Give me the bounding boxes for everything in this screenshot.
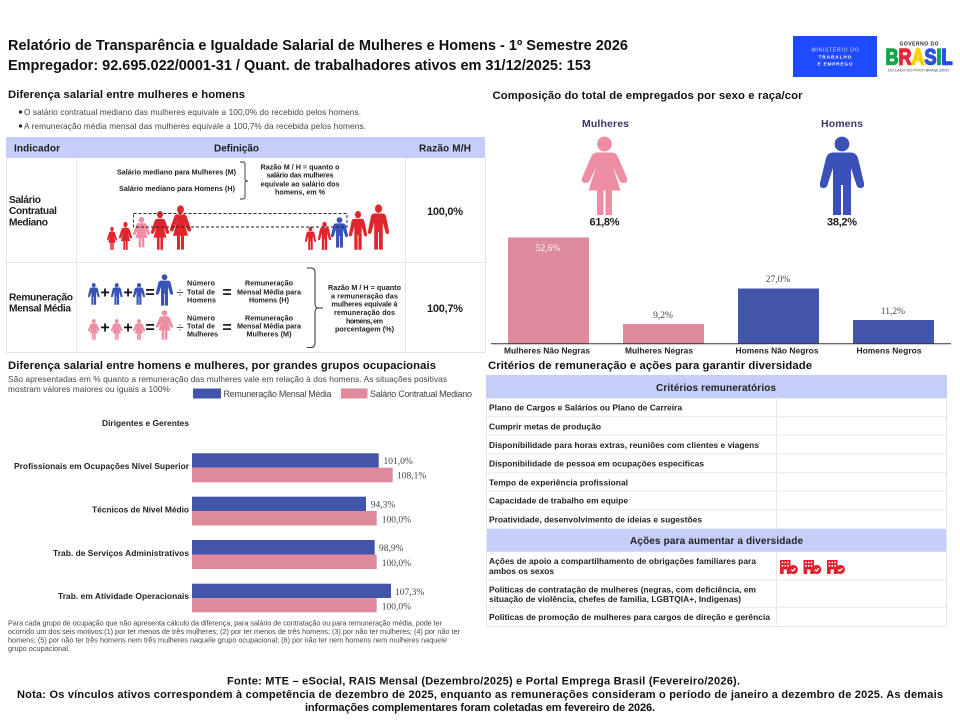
bars: profissionais: [192, 453, 426, 482]
bars: técnicos: [192, 497, 411, 526]
list: ações: Politicas de promoção de mulheres para cargos de direção e gerência: [489, 612, 770, 622]
formula: mulheres: Mulheres (M): [246, 330, 292, 339]
logo: governo do brasil: GOVERNO DO: [900, 42, 939, 48]
definition text: razão remuneração: porcentagem (%): [335, 325, 395, 334]
formula: homens: +: [123, 284, 133, 302]
list: critérios: Plano de Cargos e Salários ou Plano de Carreira: [489, 403, 682, 413]
heading: grupos ocupacionais: Diferença salarial entre homens e mulheres, por grandes grupos ocupacionais: [8, 360, 436, 372]
table header: ações: Ações para aumentar a diversidade: [630, 536, 803, 547]
bars: profissionais: 101,0%: [384, 457, 413, 467]
bar chart: composição: 11,2%: [881, 307, 905, 317]
list: critérios: Tempo de experiência profissional: [489, 477, 628, 487]
bar chart: composição: Mulheres Negras: [625, 346, 693, 356]
formula: mulheres: =: [145, 320, 155, 336]
list: ações: Politicas de contratação de mulheres (negras, com deficiência, em: [489, 584, 756, 594]
text: explicação: mostram valores maiores ou iguais a 100%: [8, 384, 171, 394]
icon block: mulheres: 61,8%: [590, 216, 620, 228]
bars: serviços administrativos: 100,0%: [382, 559, 411, 569]
formula: homens: =: [145, 284, 155, 302]
definition text: salário mediano: salário das mulheres: [266, 171, 334, 180]
icon block: mulheres: [582, 118, 629, 228]
bar chart: composição: 52,6%: [536, 244, 560, 254]
formula: mulheres: Número: [187, 314, 216, 323]
definition text: razão remuneração: remuneração dos: [334, 308, 395, 317]
formula: homens: =: [222, 284, 232, 302]
definition text: razão remuneração: [328, 283, 402, 334]
row label: remuneração mensal média: Remuneração: [9, 292, 73, 304]
text: nota sobre grupos: [8, 618, 461, 653]
definition text: razão remuneração: homens, em: [346, 316, 383, 325]
bars: técnicos: 94,3%: [371, 500, 395, 510]
title: Empregador: 92.695.022/0001-31 / Quant. de trabalhadores ativos em 31/12/2025: 153: [8, 58, 591, 74]
list: critérios: Proatividade, desenvolvimento de ideias e sugestões: [489, 514, 702, 524]
category labels: Trab. em Atividade Operacionais: [58, 591, 189, 601]
category labels: [14, 418, 190, 601]
list: ações: Ações de apoio a compartilhamento de obrigações familiares para: [489, 556, 756, 566]
text: explicação: São apresentadas em % quanto a remuneração das mulheres vale em relação à dos homens. As situações positivas: [8, 374, 447, 384]
category labels: Técnicos de Nível Médio: [92, 504, 189, 514]
formula: mulheres: Mensal Média para: [237, 322, 302, 331]
icons: homens ordenados por salário: [305, 204, 389, 250]
bars: atividade operacional: 107,3%: [395, 588, 424, 598]
bar chart: composição: Homens Não Negros: [736, 346, 819, 356]
icons: mulheres ordenadas por salário: [107, 205, 191, 250]
list: ações: ambos os sexos: [489, 566, 554, 576]
formula: mulheres: [88, 310, 302, 340]
list: critérios: [489, 403, 759, 524]
bullets: resumo: O salário contratual mediano das mulheres equivale a 100,0% do recebido pelos homens.: [24, 107, 361, 117]
list: ações: situação de violência, chefes de familia, LGBTQIA+, Indigenas): [489, 594, 741, 604]
icons: empresa com selo: [780, 560, 845, 574]
bars: serviços administrativos: [192, 540, 411, 569]
definition text: salário mediano: Salário mediano para Homens (H): [119, 184, 236, 193]
text: nota sobre grupos: Para cada grupo de ocupação que não apresenta cálculo da diferença, para salário de contratação ou para remuneração média, pode ter: [8, 618, 443, 628]
definition text: razão remuneração: Razão M / H = quanto: [328, 283, 402, 292]
list: critérios: Cumprir metas de produção: [489, 421, 601, 431]
bars: técnicos: 100,0%: [382, 516, 411, 526]
formula: mulheres: Remuneração: [245, 314, 294, 323]
bullets: resumo: A remuneração média mensal das mulheres equivale a 100,7% da recebida pelos homens.: [24, 121, 366, 131]
icon block: homens: 38,2%: [827, 216, 857, 228]
title: [8, 38, 628, 74]
definition text: razão remuneração: a remuneração das: [331, 291, 398, 300]
formula: mulheres: +: [100, 320, 110, 336]
icon block: homens: [820, 118, 864, 228]
logo: governo do brasil: DO LADO DO POVO BRASILEIRO: [888, 68, 949, 72]
formula: mulheres: ÷: [176, 320, 184, 335]
bullets: resumo: [19, 107, 366, 131]
formula: homens: [88, 274, 302, 306]
footer: fonte e nota: informações complementares foram coletadas em fevereiro de 2026.: [305, 702, 655, 714]
icon block: mulheres: Mulheres: [582, 118, 629, 130]
heading: composição: Composição do total de empregados por sexo e raça/cor: [492, 90, 803, 102]
formula: homens: Homens: [187, 296, 216, 305]
definition text: salário mediano: equivale ao salário dos: [260, 179, 340, 188]
row label: salário contratual mediano: Contratual: [9, 206, 57, 217]
legend: [193, 388, 472, 399]
list: critérios: Disponibilidade de pessoa em ocupações especificas: [489, 459, 704, 469]
formula: homens: Homens (H): [249, 296, 290, 305]
logo: governo do brasil: BRASIL: [886, 44, 952, 70]
logo: ministério: MINISTÉRIO DO: [812, 47, 859, 54]
category labels: Trab. de Serviços Administrativos: [53, 548, 189, 558]
bar chart: composição: [491, 238, 951, 356]
formula: mulheres: Total de: [187, 322, 215, 331]
footer: fonte e nota: Nota: Os vínculos ativos correspondem à competência de dezembro de 2025, enquanto as remunerações consideram o período de janeiro a dezembro de 2025. As demais: [17, 689, 943, 701]
row label: salário contratual mediano: [9, 195, 57, 228]
heading: critérios: Critérios de remuneração e ações para garantir diversidade: [488, 360, 812, 372]
category labels: Dirigentes e Gerentes: [102, 418, 189, 428]
definition text: salário mediano: homens, em %: [275, 188, 326, 197]
row label: salário contratual mediano: Salário: [9, 195, 41, 206]
text: nota sobre grupos: homens; (5) por não ter três homens nem três mulheres naquele grupo ocupacional; (6) por não ter nem homens nem mulheres naquele: [8, 636, 447, 645]
heading: diferença salarial: Diferença salarial entre mulheres e homens: [8, 89, 245, 101]
value: salário contratual mediano: 100,0%: [427, 206, 463, 218]
definition text: salário mediano: Salário mediano para Mulheres (M): [117, 168, 237, 176]
definition text: razão remuneração: mulheres equivale à: [332, 300, 398, 309]
legend: Salário Contratual Mediano: [370, 389, 472, 399]
bar chart: composição: Homens Negros: [856, 346, 922, 356]
title: Relatório de Transparência e Igualdade Salarial de Mulheres e Homens - 1º Semestre 2026: [8, 38, 628, 54]
logo: ministério: [793, 36, 877, 77]
table header: critérios remuneratórios: Critérios remuneratórios: [656, 383, 776, 394]
text: nota sobre grupos: ocorrido um dos seis motivos:(1) por ter menos de três mulheres; (2) por ter menos de três homens; (3) por não ter mulheres; (4) por não ter: [8, 627, 461, 636]
list: critérios: Capacidade de trabalho em equipe: [489, 496, 628, 506]
formula: homens: Total de: [187, 288, 215, 297]
bars: atividade operacional: 100,0%: [382, 602, 411, 612]
row label: salário contratual mediano: Mediano: [9, 218, 48, 228]
formula: homens: Remuneração: [245, 279, 294, 288]
logo: ministério: TRABALHO: [818, 54, 852, 60]
panel: tabela de indicadores: Indicador: [14, 144, 60, 154]
formula: homens: Número: [187, 279, 216, 288]
formula: mulheres: +: [123, 320, 133, 336]
bar chart: composição: 27,0%: [766, 275, 790, 285]
logo: ministério: E EMPREGO: [818, 61, 853, 67]
formula: mulheres: =: [222, 320, 232, 336]
formula: homens: ÷: [176, 285, 184, 300]
definition text: salário mediano: [117, 162, 340, 199]
list: ações: [489, 556, 770, 622]
panel: critérios e ações: [486, 375, 947, 626]
definition text: salário mediano: Razão M / H = quanto o: [260, 163, 340, 172]
bar chart: composição: Mulheres Não Negras: [504, 346, 590, 356]
category labels: Profissionais em Ocupações Nível Superior: [14, 461, 190, 471]
row label: remuneração mensal média: [9, 292, 73, 314]
text: explicação: [8, 374, 447, 394]
row label: remuneração mensal média: Mensal Média: [9, 304, 71, 314]
bars: serviços administrativos: 98,9%: [379, 544, 404, 554]
formula: homens: +: [100, 284, 110, 302]
bars: atividade operacional: [192, 584, 424, 612]
panel: tabela de indicadores: Definição: [214, 144, 259, 154]
bar chart: composição: 9,2%: [653, 311, 673, 321]
value: remuneração mensal média: 100,7%: [427, 303, 463, 315]
list: critérios: Disponibilidade para horas extras, reuniões com clientes e viagens: [489, 440, 759, 450]
legend: Remuneração Mensal Média: [224, 389, 332, 399]
bars: profissionais: 108,1%: [397, 472, 426, 482]
bar chart: grupos ocupacionais: [14, 418, 426, 612]
panel: tabela de indicadores: [6, 137, 486, 352]
text: nota sobre grupos: grupo ocupacional.: [8, 644, 70, 653]
icon block: homens: Homens: [821, 118, 863, 130]
formula: homens: Mensal Média para: [237, 288, 302, 297]
footer: fonte e nota: [17, 676, 943, 714]
panel: tabela de indicadores: Razão M/H: [419, 144, 471, 154]
formula: mulheres: Mulheres: [187, 330, 218, 339]
footer: fonte e nota: Fonte: MTE – eSocial, RAIS Mensal (Dezembro/2025) e Portal Emprega Brasil (Fevereiro/2026).: [227, 676, 740, 688]
